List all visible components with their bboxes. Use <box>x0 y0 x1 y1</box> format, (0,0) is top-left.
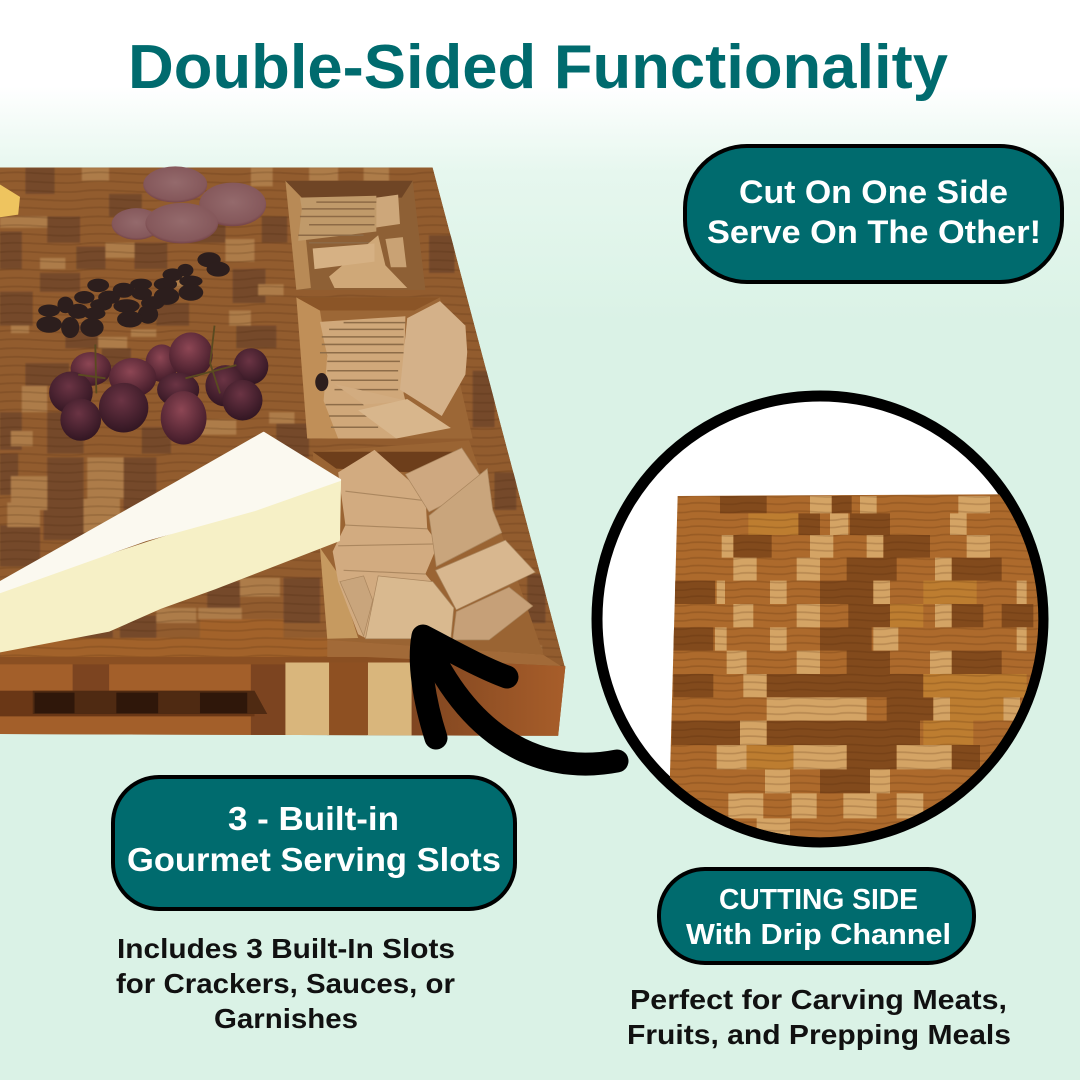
small cheese piece <box>0 184 20 217</box>
tray 1 <box>285 181 425 290</box>
board top surface <box>0 168 565 669</box>
description: serving slots <box>116 933 455 1034</box>
description: serving slots: Garnishes <box>214 1003 358 1034</box>
callout text: Cut On One Side <box>739 174 1008 210</box>
cutting side text: With Drip Channel <box>686 919 951 951</box>
grapes <box>49 326 268 445</box>
serving slots text: 3 - Built-in <box>228 800 399 837</box>
product photo: serving side of board <box>0 166 567 738</box>
circular inset: cutting side of board <box>597 396 1060 857</box>
curved arrow <box>421 636 617 764</box>
board front face <box>0 657 567 738</box>
description: serving slots: for Crackers, Sauces, or <box>116 968 455 999</box>
chocolate beans <box>36 252 230 338</box>
callout pill: cutting side <box>659 869 974 963</box>
salami <box>112 166 266 244</box>
callout text: Serve On The Other! <box>707 214 1041 250</box>
serving slots text: Gourmet Serving Slots <box>127 841 501 878</box>
brie cheese wedge <box>0 433 340 651</box>
tray 2 <box>296 297 473 439</box>
tray 3 <box>313 440 544 655</box>
description: cutting side <box>627 984 1011 1050</box>
cutting side text <box>686 884 951 951</box>
rim in front of tray 3 <box>327 640 560 666</box>
callout pill: cut and serve <box>685 146 1062 282</box>
callout pill: serving slots <box>113 777 515 909</box>
callout text <box>707 174 1041 250</box>
cutting side text: CUTTING SIDE <box>719 884 918 916</box>
title: Double-Sided Functionality <box>128 33 949 102</box>
serving slots text <box>127 800 501 878</box>
description: cutting side: Fruits, and Prepping Meals <box>627 1019 1011 1050</box>
description: cutting side: Perfect for Carving Meats, <box>630 984 1007 1015</box>
description: serving slots: Includes 3 Built-In Slots <box>117 933 455 964</box>
